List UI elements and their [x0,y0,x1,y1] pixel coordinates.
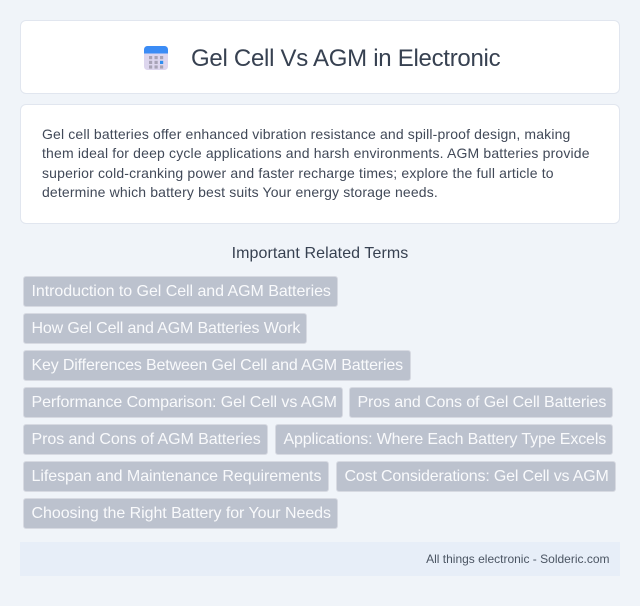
text block: summary: Gel cell batteries offer enhanced vibration resistance and spill-proof design, making [42,126,570,142]
tag: pros and cons agm: Pros and Cons of AGM Batteries [32,431,261,448]
tag: cost: Cost Considerations: Gel Cell vs AGM [344,468,609,485]
text block: summary: determine which battery best suits Your energy storage needs. [42,184,438,200]
tag: introduction: Introduction to Gel Cell and AGM Batteries [32,283,331,300]
heading: related terms: Important Related Terms [232,245,408,262]
tag: performance comparison: Performance Comparison: Gel Cell vs AGM [32,394,337,411]
panel: summary card [20,104,620,224]
footer [20,542,620,576]
icon: calendar grid [144,46,168,70]
tag: performance comparison [23,387,343,418]
tag: applications: Applications: Where Each Battery Type Excels [284,431,606,448]
tag: cost [336,461,616,492]
tag: lifespan: Lifespan and Maintenance Requirements [32,468,321,485]
tag: pros and cons gel: Pros and Cons of Gel Cell Batteries [358,394,606,411]
tag: applications [275,424,613,455]
text block: summary [42,126,590,200]
text block: summary: superior cold-cranking power and faster recharge times; explore the full article to [42,165,554,181]
tag: pros and cons gel [349,387,613,418]
tag: introduction [23,276,338,307]
panel: title card [20,20,620,94]
tag: key differences: Key Differences Between Gel Cell and AGM Batteries [32,357,403,374]
title: Gel Cell Vs AGM in Electronic [191,45,500,72]
tag: how they work: How Gel Cell and AGM Batteries Work [32,320,300,337]
tag: how they work [23,313,307,344]
tag: choosing [23,498,338,529]
tag: choosing: Choosing the Right Battery for Your Needs [32,505,331,522]
tag: pros and cons agm [23,424,268,455]
footer credit: All things electronic - Solderic.com [426,552,610,566]
tag: lifespan [23,461,329,492]
tag: key differences [23,350,411,381]
text block: summary: them ideal for deep cycle applications and harsh environments. AGM batteries provide [42,145,590,161]
